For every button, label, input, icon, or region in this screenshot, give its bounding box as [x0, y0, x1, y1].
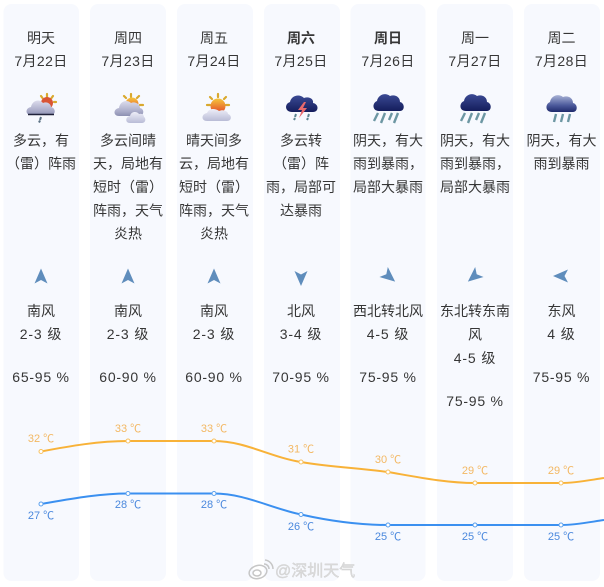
panel: day 5 — [350, 4, 426, 581]
day 2 description: 阵雨，天气 — [93, 202, 163, 218]
day 2 description: 炎热 — [114, 226, 142, 242]
panel: day 1 — [4, 4, 79, 581]
low temperature labels: 27 ℃ — [28, 510, 54, 522]
low temperature labels: 28 ℃ — [201, 499, 227, 511]
day 5 wind: 西北转北风 — [353, 303, 423, 319]
day 7 date — [535, 30, 588, 69]
icon: cloudy with thunder shower — [26, 94, 56, 122]
day 6 humidity: 75-95 % — [446, 393, 504, 409]
day 4 description: （雷）阵 — [273, 156, 329, 172]
day 6 date: 7月27日 — [448, 53, 502, 69]
day 6 description: 阴天，有大 — [440, 132, 510, 148]
day 1 description: 多云，有 — [13, 132, 69, 148]
day 1 date: 7月22日 — [14, 53, 68, 69]
icon: weibo logo — [248, 560, 273, 581]
panel: day 2 — [90, 4, 166, 581]
day 7 date: 7月28日 — [535, 53, 588, 69]
day 6 description: 局部大暴雨 — [440, 179, 510, 195]
watermark — [248, 560, 355, 581]
day 6 wind — [440, 303, 510, 366]
day 2 wind: 南风 — [114, 303, 142, 319]
day 7 wind — [547, 303, 576, 342]
day 2 humidity: 60-90 % — [99, 369, 157, 385]
day 1 humidity: 65-95 % — [12, 369, 70, 385]
day 3 description: 云，局地有 — [179, 156, 249, 172]
day 1 description — [6, 132, 76, 172]
day 4 date — [274, 30, 328, 69]
icon: wind arrow north — [294, 271, 308, 286]
high temperature labels: 29 ℃ — [462, 465, 488, 477]
day 3 description: 晴天间多 — [186, 132, 242, 148]
icon: wind arrow south — [122, 268, 134, 284]
day 4 description: 达暴雨 — [280, 202, 322, 218]
icon: wind arrow east — [553, 270, 568, 282]
day 6 description: 雨到暴雨， — [440, 156, 510, 172]
day 6 description — [440, 132, 510, 195]
day 7 description: 雨到暴雨 — [534, 156, 590, 172]
day 5 humidity: 75-95 % — [359, 369, 417, 385]
day 4 wind — [280, 303, 322, 342]
day 3 date: 7月24日 — [187, 53, 241, 69]
low temperature labels — [28, 499, 574, 543]
day 6 date — [448, 30, 502, 69]
day 5 wind — [353, 303, 423, 342]
day 2 description: 多云间晴 — [100, 132, 156, 148]
panel: day 6 — [437, 4, 513, 581]
day 1 wind: 2-3 级 — [20, 326, 62, 342]
day 4 date: 7月25日 — [274, 53, 328, 69]
day 3 wind: 南风 — [200, 303, 228, 319]
day 3 description: 阵雨，天气 — [179, 202, 249, 218]
day 2 description — [93, 132, 163, 242]
day 2 date — [101, 30, 155, 69]
watermark: @深圳天气 — [275, 562, 355, 580]
day 7 description — [526, 132, 596, 172]
day 3 description: 短时（雷） — [179, 179, 249, 195]
day 7 date: 周二 — [548, 30, 576, 46]
day 3 wind: 2-3 级 — [193, 326, 235, 342]
panel: day 4 — [264, 4, 340, 581]
day 4 wind: 3-4 级 — [280, 326, 322, 342]
day 2 date: 周四 — [114, 30, 142, 46]
icon: wind arrow northeast to southeast — [464, 267, 484, 287]
day 6 wind: 4-5 级 — [454, 350, 496, 366]
day 3 description — [179, 132, 249, 242]
day 1 date — [14, 30, 68, 69]
day 2 description: 天，局地有 — [93, 156, 163, 172]
icon: wind arrow south — [208, 268, 220, 284]
day 3 description: 炎热 — [200, 226, 228, 242]
day 4 date: 周六 — [287, 30, 315, 46]
day 5 date — [361, 30, 415, 69]
day 5 date: 7月26日 — [361, 53, 415, 69]
low temperature labels: 25 ℃ — [462, 531, 488, 543]
day 7 description: 阴天，有大 — [526, 132, 596, 148]
high temperature labels: 32 ℃ — [28, 433, 54, 445]
low temperature labels: 26 ℃ — [288, 521, 314, 533]
day 3 humidity: 60-90 % — [185, 369, 243, 385]
day 2 description: 短时（雷） — [93, 179, 163, 195]
icon: wind arrow northwest to north — [379, 267, 399, 287]
panel: day 7 — [524, 4, 600, 581]
day 5 description: 局部大暴雨 — [353, 179, 423, 195]
high temperature labels: 31 ℃ — [288, 444, 314, 456]
day 2 date: 7月23日 — [101, 53, 155, 69]
panel: day 3 — [177, 4, 253, 581]
day 5 wind: 4-5 级 — [367, 326, 409, 342]
day 1 description: （雷）阵雨 — [6, 156, 76, 172]
day 2 wind — [107, 303, 149, 342]
day 4 description: 雨，局部可 — [266, 179, 336, 195]
day 6 wind: 风 — [468, 326, 482, 342]
high temperature labels: 33 ℃ — [201, 423, 227, 435]
day 4 wind: 北风 — [287, 303, 315, 319]
day 3 wind — [193, 303, 235, 342]
icon: wind arrow south — [34, 268, 48, 284]
icon: thunderstorm — [286, 95, 318, 120]
day 5 description — [353, 132, 423, 195]
icon: heavy rain — [373, 94, 404, 123]
high temperature labels: 29 ℃ — [548, 465, 574, 477]
high temperature labels: 33 ℃ — [115, 423, 141, 435]
low temperature labels: 25 ℃ — [375, 531, 401, 543]
icon: cloudy to sunny — [114, 94, 145, 123]
day 3 date — [187, 30, 241, 69]
line chart: high temperature — [28, 423, 604, 485]
day 4 humidity: 70-95 % — [272, 369, 330, 385]
icon: overcast heavy rain — [546, 95, 577, 122]
day 5 description: 雨到暴雨， — [353, 156, 423, 172]
icon: heavy rain — [460, 94, 491, 123]
icon: sunny to cloudy — [202, 94, 231, 121]
line chart: low temperature — [28, 492, 604, 543]
day 1 wind: 南风 — [27, 303, 55, 319]
low temperature labels: 25 ℃ — [548, 531, 574, 543]
day 6 wind: 东北转东南 — [440, 303, 510, 319]
day 3 date: 周五 — [200, 30, 228, 46]
day 7 wind: 东风 — [548, 303, 576, 319]
day 4 description — [266, 132, 336, 218]
high temperature labels: 30 ℃ — [375, 454, 401, 466]
day 7 wind: 4 级 — [547, 326, 576, 342]
low temperature labels: 28 ℃ — [115, 499, 141, 511]
day 1 wind — [20, 303, 62, 342]
high temperature labels — [28, 423, 574, 477]
day 2 wind: 2-3 级 — [107, 326, 149, 342]
day 6 date: 周一 — [461, 30, 489, 46]
day 7 humidity: 75-95 % — [533, 369, 590, 385]
day 1 date: 明天 — [27, 30, 55, 46]
day 5 date: 周日 — [374, 30, 402, 46]
day 5 description: 阴天，有大 — [353, 132, 423, 148]
day 4 description: 多云转 — [280, 132, 322, 148]
